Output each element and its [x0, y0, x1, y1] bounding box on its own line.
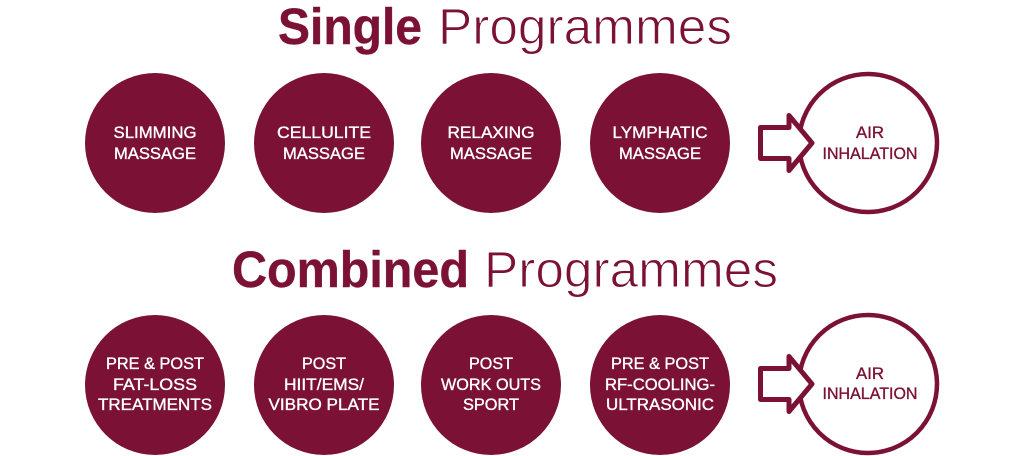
circle: relaxing massage: MASSAGE	[450, 145, 532, 163]
outlined circle: air inhalation second	[799, 315, 937, 453]
circle: pre and post rf cooling ultrasonic	[590, 315, 730, 455]
outlined circle: air inhalation second: AIR	[856, 365, 884, 383]
circle: post hiit ems vibro plate	[254, 315, 394, 455]
circle: slimming massage: MASSAGE	[114, 145, 196, 163]
circle: pre and post rf cooling ultrasonic: RF-COOLING-	[605, 376, 715, 394]
circle: cellulite massage: MASSAGE	[283, 145, 365, 163]
circle: pre and post fat-loss treatments	[85, 315, 225, 455]
circle: pre and post fat-loss treatments: TREATMENTS	[98, 396, 212, 414]
circle: slimming massage: SLIMMING	[114, 124, 196, 142]
title: Single Programmes	[278, 0, 732, 55]
arrow: to air inhalation second	[760, 356, 812, 412]
outlined circle: air inhalation: AIR	[856, 124, 884, 142]
outlined circle: air inhalation	[799, 74, 937, 212]
circle: post work outs sport: SPORT	[463, 396, 519, 414]
circle: cellulite massage	[254, 73, 394, 213]
circle: post work outs sport: WORK OUTS	[441, 376, 541, 394]
circle: lymphatic massage	[590, 73, 730, 213]
arrow: to air inhalation	[760, 116, 812, 170]
circle: pre and post fat-loss treatments: PRE & POST	[106, 355, 204, 373]
circle: post work outs sport: POST	[469, 355, 513, 373]
circle: pre and post rf cooling ultrasonic: ULTRASONIC	[606, 396, 714, 414]
circle: post work outs sport	[421, 315, 561, 455]
outlined circle: air inhalation second: INHALATION	[822, 385, 918, 403]
circle: pre and post rf cooling ultrasonic: PRE & POST	[611, 355, 709, 373]
title: Combined Programmes: Combined	[232, 241, 469, 298]
title: Combined Programmes	[232, 241, 778, 298]
circle: post hiit ems vibro plate: HIIT/EMS/	[284, 376, 364, 394]
circle: relaxing massage	[421, 73, 561, 213]
circle: lymphatic massage: LYMPHATIC	[612, 124, 708, 142]
title: Combined Programmes: Programmes	[484, 241, 778, 298]
circle: post hiit ems vibro plate: POST	[302, 355, 346, 373]
circle: relaxing massage: RELAXING	[448, 124, 534, 142]
circle: cellulite massage: CELLULITE	[277, 124, 371, 142]
outlined circle: air inhalation: INHALATION	[822, 145, 918, 163]
circle: slimming massage	[85, 73, 225, 213]
circle: post hiit ems vibro plate: VIBRO PLATE	[268, 396, 380, 414]
circle: lymphatic massage: MASSAGE	[619, 145, 701, 163]
circle: pre and post fat-loss treatments: FAT-LOSS	[113, 376, 197, 394]
